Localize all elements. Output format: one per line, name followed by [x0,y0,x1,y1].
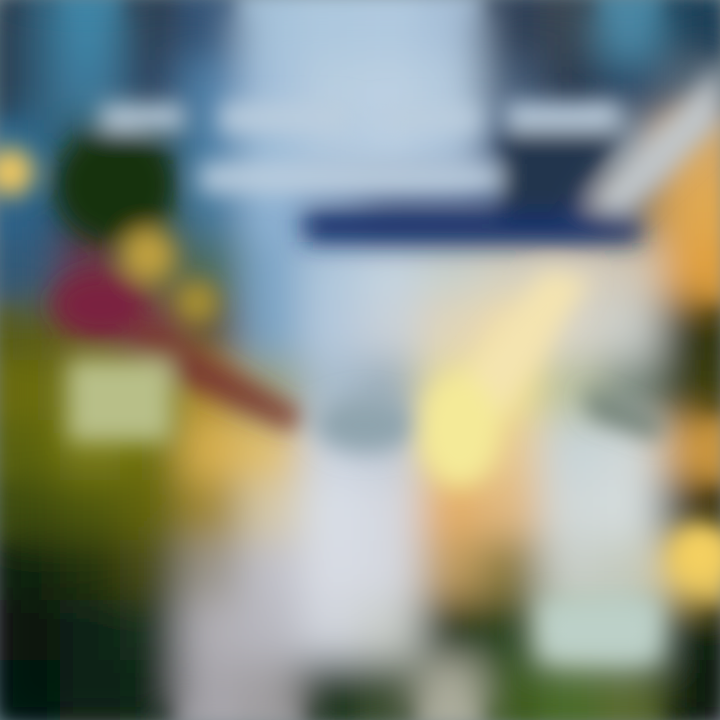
gold light one [122,229,174,281]
heading line two [200,164,520,192]
gold light two [175,280,219,324]
magenta cluster [52,271,148,339]
warm glow centre [420,375,500,485]
pale panel lower right [540,600,658,660]
yellow glow lower right [670,525,720,585]
grey mid shape [315,397,415,453]
diagonal light beam [585,65,720,215]
heading line one [100,102,620,132]
green foliage [57,130,173,240]
dark banner [305,212,640,242]
yellow light left [0,148,34,196]
pale box [68,360,172,442]
warm streak [430,270,590,420]
dark navy block [500,130,625,215]
dark streak right [585,390,660,440]
maroon diagonal [130,320,305,430]
